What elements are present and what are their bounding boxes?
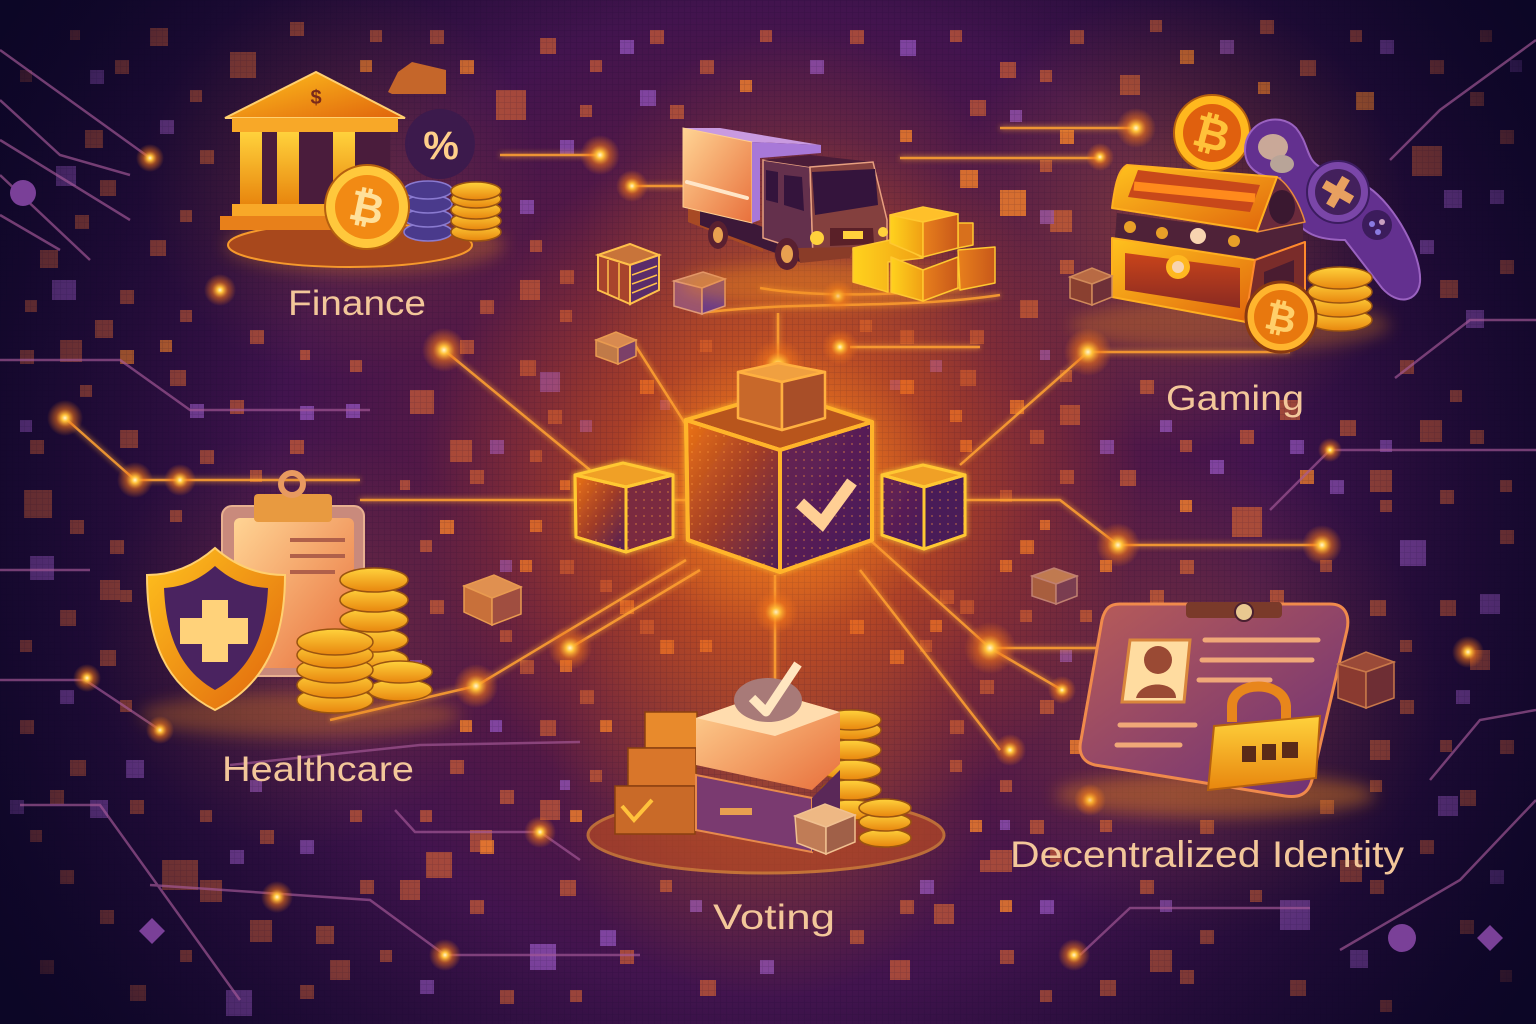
icon: bank: $ <box>310 87 322 109</box>
platform <box>228 223 472 267</box>
floating small cubes <box>464 244 1077 625</box>
left cube <box>575 463 673 552</box>
icon: truck <box>683 128 888 270</box>
panel: finance <box>220 62 505 273</box>
icon: coin stacks <box>821 710 911 847</box>
icon: bank <box>220 72 405 230</box>
central blockchain: linked cubes with checkmark <box>575 350 965 630</box>
icon: stacked boxes <box>853 207 995 301</box>
icon: bitcoin coin top <box>1174 95 1250 171</box>
icon: bitcoin coin <box>325 165 409 249</box>
panel: healthcare <box>140 473 460 737</box>
panel: voting <box>588 664 944 873</box>
label: decentralized identity: Decentralized Identity <box>1010 834 1405 875</box>
icon: coin stacks <box>297 568 432 713</box>
icon: medical shield <box>147 548 285 710</box>
icon: small crate <box>795 804 855 854</box>
icon: purple coin stack <box>404 181 452 241</box>
icon: id card <box>1080 602 1348 797</box>
main cube <box>686 392 872 572</box>
striped crate <box>598 244 659 304</box>
peripheral round nodes <box>10 180 1503 952</box>
icon: checkmark <box>800 482 852 523</box>
icon: gold coin stack <box>451 182 501 241</box>
icon: percent badge: % <box>423 124 459 168</box>
panel: supply chain truck <box>680 128 995 307</box>
right cube <box>882 465 965 549</box>
icon: left boxes <box>615 712 697 834</box>
icon: bitcoin coin: ₿ <box>345 181 389 234</box>
label: finance: Finance <box>288 284 426 323</box>
network nodes <box>47 108 1484 971</box>
label: healthcare: Healthcare <box>222 750 414 789</box>
icon: clipboard <box>222 473 364 676</box>
label: gaming: Gaming <box>1166 379 1304 418</box>
icon: bitcoin coin top: ₿ <box>1188 106 1235 163</box>
icon: small crate <box>1070 268 1112 305</box>
network lines <box>65 128 1322 760</box>
icon: gold coin stack <box>1308 267 1372 331</box>
icon: padlock <box>1208 686 1320 790</box>
icon: bitcoin coin bottom <box>1246 282 1316 352</box>
icon: small crate <box>1338 652 1394 708</box>
label: voting: Voting <box>713 898 835 937</box>
icon: treasure chest <box>1112 165 1305 322</box>
icon: small cap <box>388 62 446 94</box>
top cube <box>738 363 825 430</box>
icon: portrait <box>1122 640 1190 702</box>
panel: gaming <box>1070 95 1420 352</box>
panel: decentralized identity <box>1055 602 1394 817</box>
icon: bitcoin coin bottom: ₿ <box>1261 295 1300 343</box>
icon: game controller <box>1245 119 1420 299</box>
icon: ballot box <box>696 664 840 852</box>
icon: percent badge <box>405 109 475 179</box>
